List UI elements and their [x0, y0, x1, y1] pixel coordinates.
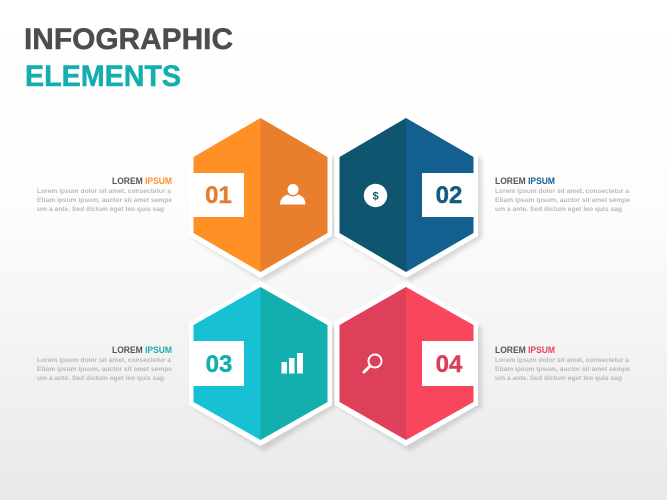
text block 03: [37, 345, 172, 382]
text block 03: Etiam ipsum ipsum, auctor sit amet sempe: [37, 366, 172, 373]
text block 04: LOREM IPSUM: [495, 345, 555, 355]
text block 01: Lorem ipsum dolor sit amet, consectetur a: [37, 188, 171, 195]
title: INFOGRAPHIC: [24, 23, 233, 56]
number box 01: [190, 173, 244, 217]
panel: hexagon 01: [189, 112, 336, 282]
title: [24, 23, 233, 93]
icon: dollar coin: [364, 184, 387, 207]
number box 03: [190, 341, 244, 386]
text block 03: Lorem ipsum dolor sit amet, consectetur a: [37, 357, 171, 364]
number box 04: 04: [436, 351, 463, 378]
icon: person: [280, 184, 306, 204]
text block 02: Lorem ipsum dolor sit amet, consectetur a: [495, 188, 629, 195]
icon: dollar coin: $: [372, 190, 379, 202]
text block 01: um a ante. Sed dictum eget leo quis sag: [37, 206, 164, 213]
number box 01: 01: [205, 182, 232, 209]
number box 03: 03: [206, 351, 232, 378]
title: ELEMENTS: [25, 60, 181, 93]
text block 02: [495, 176, 630, 213]
icon: bar chart: [282, 353, 303, 374]
icon: magnifier: [364, 354, 382, 372]
panel: hexagon 03: [189, 281, 336, 451]
number box 02: [422, 173, 477, 217]
text block 03: um a ante. Sed dictum eget leo quis sag: [37, 375, 164, 382]
text block 04: Lorem ipsum dolor sit amet, consectetur a: [495, 357, 629, 364]
text block 02: um a ante. Sed dictum eget leo quis sag: [495, 206, 622, 213]
text block 01: LOREM IPSUM: [112, 176, 172, 186]
text block 04: [495, 345, 630, 382]
text block 02: LOREM IPSUM: [495, 176, 555, 186]
number box 02: 02: [436, 182, 462, 209]
number box 04: [422, 341, 477, 386]
text block 04: um a ante. Sed dictum eget leo quis sag: [495, 375, 622, 382]
text block 02: Etiam ipsum ipsum, auctor sit amet sempe: [495, 197, 630, 204]
text block 01: [37, 176, 172, 213]
text block 03: LOREM IPSUM: [112, 345, 172, 355]
panel: hexagon 04: [334, 281, 482, 451]
text block 04: Etiam ipsum ipsum, auctor sit amet sempe: [495, 366, 630, 373]
text block 01: Etiam ipsum ipsum, auctor sit amet sempe: [37, 197, 172, 204]
panel: hexagon 02: [334, 112, 482, 282]
